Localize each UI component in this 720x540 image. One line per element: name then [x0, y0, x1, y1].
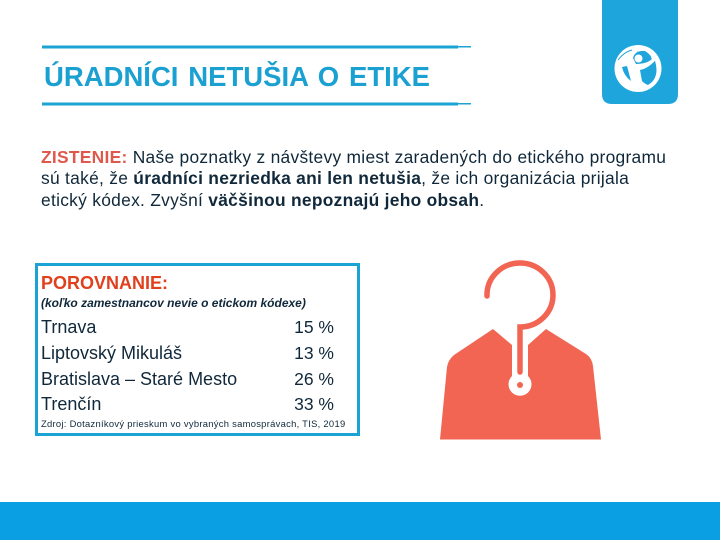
panel: comparison — [35, 263, 360, 436]
finding paragraph: etický kódex. Zvyšní väčšinou nepoznajú jeho obsah. — [41, 190, 484, 210]
finding paragraph: ZISTENIE: Naše poznatky z návštevy miest zaradených do etického programu — [41, 147, 666, 167]
row: Trnava: 15 % — [294, 317, 334, 337]
row: Trenčín — [41, 394, 334, 414]
comparison subtitle: (koľko zamestnancov nevie o etickom kódexe) — [41, 296, 306, 310]
icon: person with question mark — [440, 260, 601, 440]
row: Trnava — [41, 317, 334, 337]
row: Liptovský Mikuláš — [41, 343, 334, 363]
icon: globe logo — [614, 45, 662, 92]
bottom title rule — [42, 102, 471, 106]
row: Liptovský Mikuláš: Liptovský Mikuláš — [41, 343, 182, 363]
source note: Zdroj: Dotazníkový prieskum vo vybraných samosprávach, TIS, 2019 — [41, 418, 345, 429]
row: Trenčín: Trenčín — [41, 394, 101, 414]
row: Trnava: Trnava — [41, 317, 96, 337]
finding paragraph — [41, 147, 666, 210]
row: Bratislava – Staré Mesto — [41, 369, 334, 389]
title: ÚRADNÍCI NETUŠIA O ETIKE — [44, 61, 430, 92]
bottom band — [0, 502, 720, 540]
row: Bratislava – Staré Mesto: Bratislava – Staré Mesto — [41, 369, 237, 389]
finding paragraph: sú také, že úradníci nezriedka ani len netušia, že ich organizácia prijala — [41, 168, 629, 188]
row: Bratislava – Staré Mesto: 26 % — [294, 369, 334, 389]
row: Liptovský Mikuláš: 13 % — [294, 343, 334, 363]
comparison heading: POROVNANIE: — [41, 273, 168, 293]
row: Trenčín: 33 % — [294, 394, 334, 414]
top title rule — [42, 46, 471, 48]
logo tab — [602, 0, 678, 104]
